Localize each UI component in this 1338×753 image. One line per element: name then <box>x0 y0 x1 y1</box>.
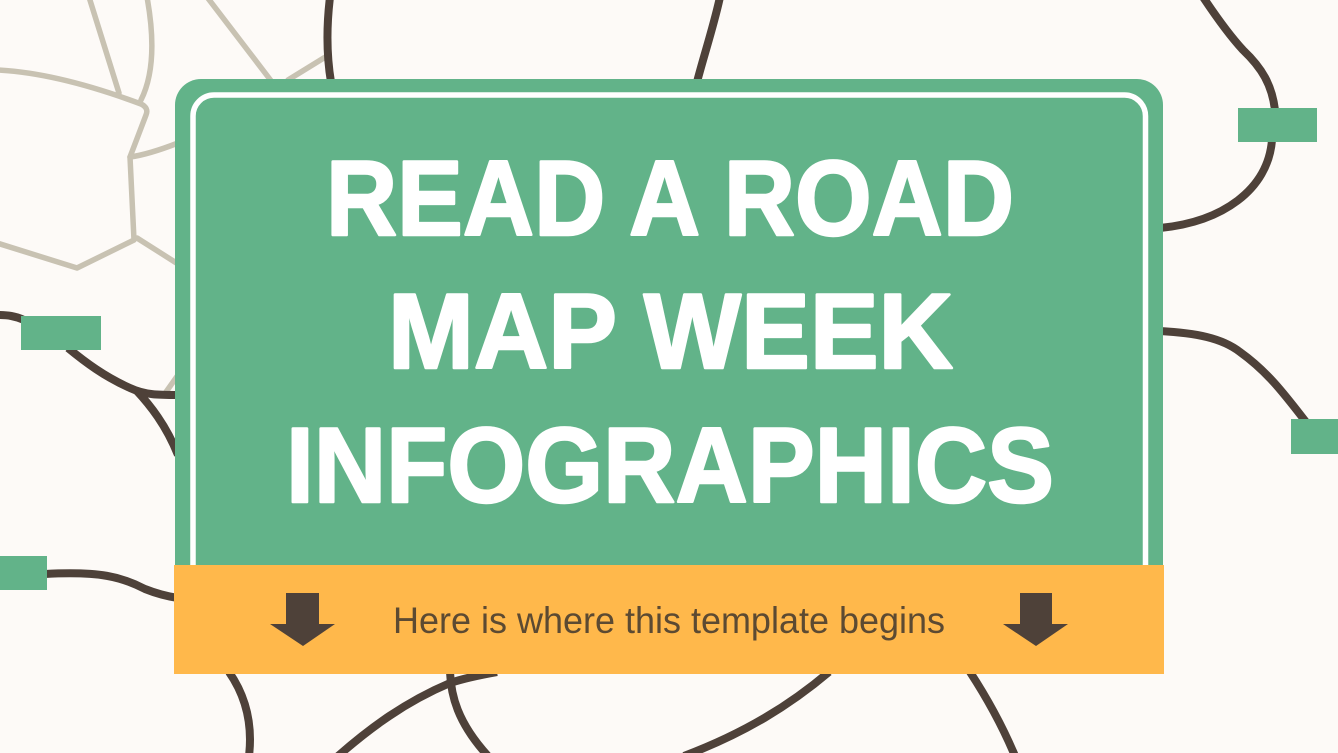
panel: green title sign <box>175 79 1163 568</box>
title: INFOGRAPHICS <box>286 405 1054 525</box>
road sign: middle left <box>21 316 101 350</box>
banner text: Here is where this template begins <box>393 600 945 641</box>
icon: right down arrow <box>1003 593 1068 646</box>
panel: orange banner <box>174 565 1164 674</box>
road sign: top right <box>1238 108 1317 142</box>
title <box>286 138 1054 525</box>
road sign: bottom left <box>0 556 47 590</box>
minor roads: beige map lines <box>0 0 327 392</box>
road sign: middle right <box>1291 419 1338 454</box>
icon: left down arrow <box>270 593 335 646</box>
title: READ A ROAD <box>326 138 1014 258</box>
title: MAP WEEK <box>388 271 953 391</box>
